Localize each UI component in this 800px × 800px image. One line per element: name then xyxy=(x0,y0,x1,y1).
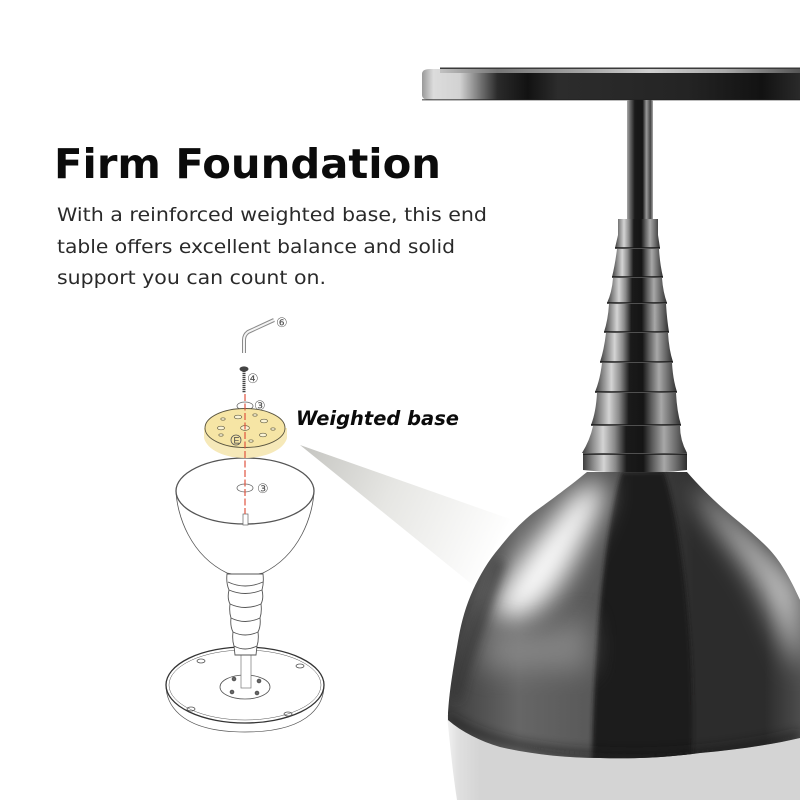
icon: screw xyxy=(240,366,248,393)
description text: With a reinforced weighted base, this end xyxy=(57,204,487,226)
pin xyxy=(243,514,248,525)
description text xyxy=(57,204,487,289)
red assembly line xyxy=(244,394,246,514)
part number 4: ④ xyxy=(247,372,259,387)
weighted base label: Weighted base xyxy=(296,407,459,430)
lower ribbed spindle outline xyxy=(227,574,263,655)
ribbed spindle xyxy=(582,219,687,473)
flange xyxy=(220,675,270,699)
callout beam from weighted base to table base xyxy=(300,445,510,586)
table stem xyxy=(627,100,653,220)
weighted base disc xyxy=(204,408,287,458)
table top xyxy=(422,68,800,100)
title: Firm Foundation xyxy=(54,140,441,188)
part number 3 upper: ③ xyxy=(254,399,266,414)
exploded assembly diagram xyxy=(166,316,324,732)
weighted base disc: E xyxy=(234,436,240,446)
lower stem xyxy=(241,654,251,688)
icon: hex key xyxy=(244,320,274,353)
part number 3 lower: ③ xyxy=(257,482,269,497)
lower washer xyxy=(237,484,253,492)
description text: table offers excellent balance and solid xyxy=(57,236,455,258)
description text: support you can count on. xyxy=(57,267,326,289)
bowl xyxy=(176,458,314,575)
part number 6: ⑥ xyxy=(276,316,288,331)
product photo: metal end table xyxy=(422,68,800,765)
base plate xyxy=(166,647,324,732)
upper washer xyxy=(237,402,253,410)
weighted dome base xyxy=(440,465,800,765)
floor shadow xyxy=(447,715,800,800)
